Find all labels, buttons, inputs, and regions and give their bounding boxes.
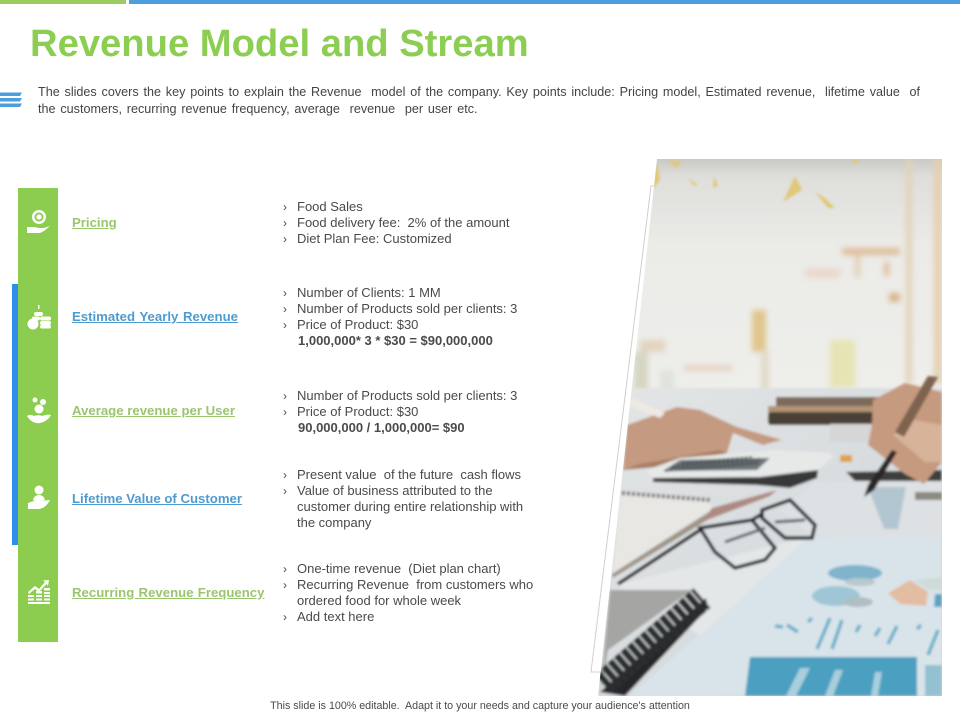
text block: recurring revenue: › — [283, 562, 287, 576]
blue table — [745, 657, 917, 696]
chart paper — [630, 537, 942, 696]
text block: recurring revenue: Recurring Revenue from customers who — [297, 577, 533, 592]
text block: pricing: Food delivery fee: 2% of the amount — [297, 215, 509, 230]
text block: recurring revenue: One-time revenue (Diet plan chart) — [297, 561, 501, 576]
text block: average revenue — [283, 388, 517, 435]
pen — [895, 376, 938, 437]
text block: lifetime value: › — [283, 468, 287, 482]
text block: pricing: Food Sales — [297, 199, 363, 214]
wedge desk — [616, 537, 808, 635]
text block: recurring revenue: Add text here — [297, 609, 374, 624]
icon: hand with coin — [27, 210, 50, 233]
footer note: This slide is 100% editable. Adapt it to your needs and capture your audience's attention — [270, 700, 690, 712]
text block: average revenue: Price of Product: $30 — [297, 404, 418, 419]
right hand — [868, 383, 942, 484]
intro text — [38, 85, 920, 116]
text block: pricing: › — [283, 200, 287, 214]
text block: estimated revenue: Number of Clients: 1 MM — [297, 285, 441, 300]
icon: coin stacks — [28, 305, 51, 330]
text block: estimated revenue: 1,000,000* 3 * $30 = $90,000,000 — [298, 333, 493, 348]
books — [776, 397, 880, 407]
text block: lifetime value — [283, 467, 523, 530]
text block: average revenue: 90,000,000 / 1,000,000= $90 — [298, 420, 465, 435]
text block: average revenue: › — [283, 389, 287, 403]
text block: lifetime value: Value of business attributed to the — [297, 483, 493, 498]
icon: growth chart — [28, 580, 50, 604]
text block: recurring revenue: › — [283, 578, 287, 592]
text block: estimated revenue: Number of Products sold per clients: 3 — [297, 301, 517, 316]
intro text: The slides covers the key points to explain the Revenue model of the company. Key points include: Pricing model, Estimated revenue, lifetime value of — [38, 85, 920, 99]
icon: hand with coins — [27, 398, 51, 424]
text block: estimated revenue: › — [283, 302, 287, 316]
intro text: the customers, recurring revenue frequency, average revenue per user etc. — [38, 102, 478, 116]
text block: pricing: Diet Plan Fee: Customized — [297, 231, 452, 246]
text block: lifetime value: › — [283, 484, 287, 498]
notebook spiral rings — [622, 493, 710, 500]
desk surface — [590, 388, 950, 700]
text block: estimated revenue: › — [283, 286, 287, 300]
icon: menu lines — [0, 92, 22, 107]
green icon column — [18, 188, 58, 642]
small bars — [775, 618, 938, 655]
text block: pricing — [283, 199, 510, 246]
pie charts — [828, 565, 882, 581]
text block: lifetime value: Present value of the future cash flows — [297, 467, 521, 482]
phone and pad — [860, 456, 942, 468]
top accent bar green — [0, 0, 126, 4]
right paper — [894, 502, 941, 536]
heading: lifetime value of customer: Lifetime Value of Customer — [72, 491, 242, 506]
left hand — [623, 407, 782, 470]
calculator — [647, 450, 833, 478]
text block: recurring revenue: ordered food for whole week — [297, 593, 461, 608]
icon: person on hand — [28, 486, 50, 509]
text block: recurring revenue: › — [283, 610, 287, 624]
text block: lifetime value: customer during entire relationship with — [297, 499, 523, 514]
upper notebook — [613, 492, 712, 573]
glasses — [618, 500, 815, 584]
heading: recurring revenue frequency: Recurring Revenue Frequency — [72, 585, 264, 600]
photo: desk with calculator and charts — [590, 159, 942, 696]
text block: recurring revenue — [283, 561, 533, 624]
text block: pricing: › — [283, 232, 287, 246]
blue side bar — [12, 284, 18, 545]
text block: average revenue: › — [283, 405, 287, 419]
calculator keys — [665, 457, 762, 471]
text block: pricing: › — [283, 216, 287, 230]
text block: estimated revenue: Price of Product: $30 — [297, 317, 418, 332]
lower notebook — [600, 590, 692, 696]
top accent bar blue — [129, 0, 960, 4]
heading: average revenue per user: Average revenue per User — [72, 403, 235, 418]
text block: estimated revenue — [283, 285, 517, 348]
text block: estimated revenue: › — [283, 318, 287, 332]
heading: estimated yearly revenue: Estimated Yearly Revenue — [72, 309, 238, 324]
title: Revenue Model and Stream — [30, 22, 529, 65]
text block: lifetime value: the company — [297, 515, 371, 530]
heading: pricing: Pricing — [72, 215, 117, 230]
text block: average revenue: Number of Products sold per clients: 3 — [297, 388, 517, 403]
thin photo frame line — [591, 186, 654, 672]
